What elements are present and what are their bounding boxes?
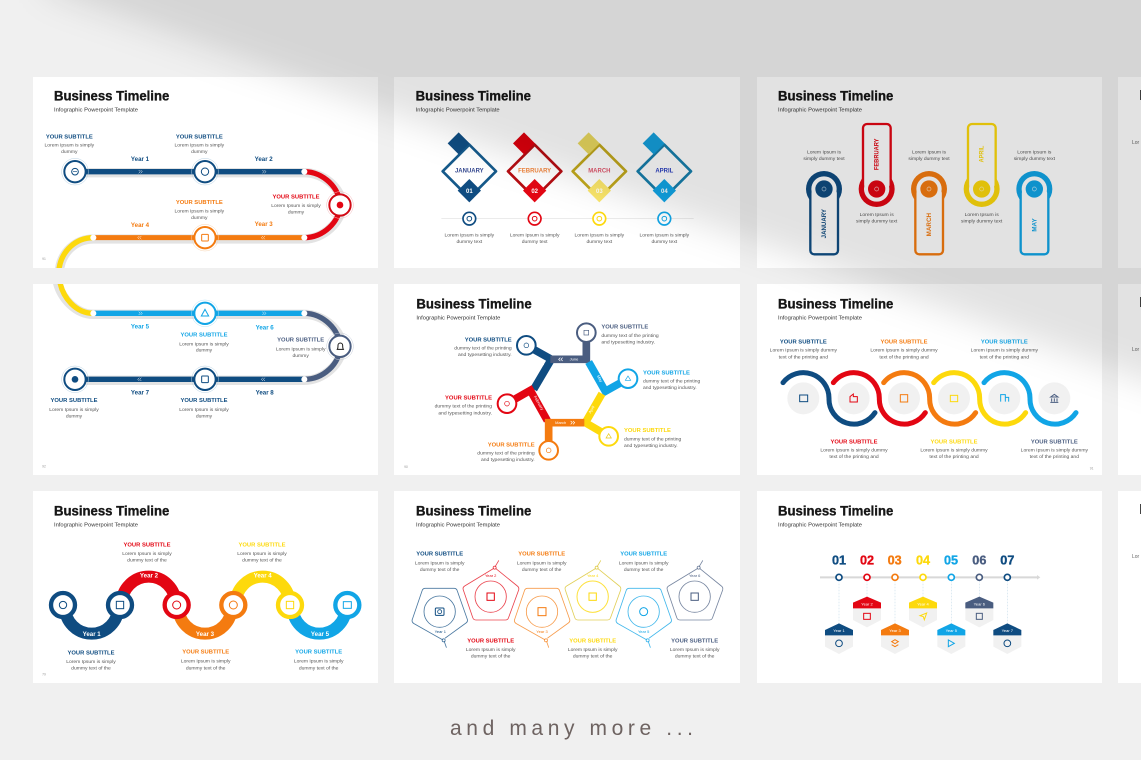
heading subtitle: Infographic Powerpoint Template: [416, 522, 500, 528]
slide panel: ring and arc timeline: [33, 491, 378, 683]
year labels: Year 5: [311, 631, 330, 638]
text block: navy: dummy text of the: [420, 567, 460, 573]
cropped next-column slides: Lor: [1132, 347, 1140, 353]
text block: yellow: [568, 639, 618, 660]
page number: 92: [42, 464, 46, 468]
icon discs: [787, 382, 1070, 414]
text block: yellow: [237, 543, 287, 564]
text block: red: Lorem Ipsum is simply dummy: [820, 448, 888, 454]
captions: simply dummy text: [856, 218, 898, 224]
text block: slate subtitle: YOUR SUBTITLE: [277, 338, 324, 344]
diamond: april: 04: [661, 189, 668, 195]
captions: Lorem Ipsum is simply: [510, 233, 560, 239]
text block: yellow: YOUR SUBTITLE: [569, 639, 616, 645]
text block: yellow: [920, 439, 988, 460]
timeline rule: [441, 218, 694, 220]
text block: navy subtitle left: dummy: [61, 149, 78, 155]
captions: Lorem Ipsum is simply: [640, 233, 690, 239]
hexagon tag year 4: [909, 597, 937, 627]
heading: Business Timeline: [416, 504, 532, 519]
text block: navy: YOUR SUBTITLE: [465, 337, 512, 343]
step numbers: 07: [1000, 554, 1014, 568]
text block: orange: Lorem Ipsum is simply: [181, 659, 231, 665]
text block: red: [466, 639, 516, 660]
text block: navy: [454, 337, 512, 358]
text block: orange: dummy text of the: [186, 665, 226, 671]
year labels: Year 5: [131, 324, 150, 331]
year labels: Year 2: [255, 156, 273, 163]
text block: blue: [619, 552, 669, 573]
text block: navy: and typesetting industry.: [458, 352, 512, 358]
hexagon tag year 5: [937, 623, 965, 654]
axis markers: [836, 574, 1010, 580]
pill: april: [964, 124, 1000, 207]
captions: [445, 233, 690, 245]
text block: yellow: YOUR SUBTITLE: [931, 439, 978, 445]
text block: orange: YOUR SUBTITLE: [182, 650, 229, 656]
pentagon year 4: [565, 561, 621, 620]
icon: blue marker: [658, 212, 671, 225]
text block: navy subtitle center: [175, 134, 225, 155]
text block: red: [820, 439, 888, 460]
captions: [803, 150, 1056, 224]
text block: navy: dummy text of the printing: [454, 346, 512, 352]
text block: blue: YOUR SUBTITLE: [981, 339, 1028, 345]
hexagon tag year 6: Year 6: [974, 601, 986, 606]
captions: dummy text: [651, 239, 678, 245]
captions: Lorem Ipsum is: [1017, 150, 1052, 156]
pentagon year 4: Year 4: [587, 573, 599, 578]
pentagon year 6: Year 6: [689, 573, 701, 578]
diamond: january: JANUARY: [455, 168, 484, 174]
heading: Business Timeline: [778, 296, 894, 311]
step numbers: 05: [944, 554, 958, 568]
text block: blue: Lorem Ipsum is simply: [294, 659, 344, 665]
pentagon year 2: Year 2: [485, 573, 497, 578]
node: whatsapp: [192, 158, 218, 185]
captions: dummy text: [586, 239, 613, 245]
diamond: april: [638, 132, 691, 202]
text block: blue: [294, 650, 344, 671]
text block: navy subtitle left: Lorem Ipsum is simply: [45, 143, 95, 149]
text block: slate: [670, 639, 720, 660]
text block: navy: YOUR SUBTITLE: [780, 339, 827, 345]
text block: navy subtitle left: YOUR SUBTITLE: [51, 398, 98, 404]
diamond: january: 01: [466, 189, 473, 195]
diamond: february: 02: [531, 189, 539, 195]
hexagon tag year 2: Year 2: [861, 601, 873, 606]
text block: orange subtitle: [175, 200, 225, 221]
text block: navy: text of the printing and: [779, 354, 828, 360]
page number: 90: [404, 465, 408, 469]
pill: march: [911, 171, 947, 254]
text block: navy subtitle center: Lorem Ipsum is simply: [179, 407, 229, 413]
heading: Business Timeline: [54, 504, 170, 519]
node: orange: [192, 224, 218, 251]
node: year 1 start: [62, 158, 88, 185]
text block: blue subtitle: dummy: [196, 348, 213, 354]
page number: 91: [1090, 466, 1094, 470]
pill: april: APRIL: [980, 145, 986, 162]
pill: january: [806, 171, 842, 254]
node: slate: [327, 333, 353, 360]
heading: Business Timeline: [54, 89, 170, 104]
heading: Business Timeline: [778, 89, 894, 104]
diamond: january: [443, 132, 496, 202]
year labels: Year 2: [140, 573, 159, 580]
slide panel: hexagon timeline: [394, 284, 740, 475]
text block: orange: [517, 552, 567, 573]
year labels: Year 3: [196, 631, 215, 638]
text block: navy subtitle left: YOUR SUBTITLE: [46, 134, 93, 140]
text block: blue subtitle: [179, 332, 229, 354]
hexagon tag year 1: Year 1: [833, 628, 845, 633]
pentagon year 6: [667, 561, 723, 620]
text block: blue: text of the printing and: [980, 354, 1029, 360]
year labels: [131, 324, 274, 396]
pill: may: MAY: [1032, 218, 1038, 232]
hexagon tag year 6: [965, 597, 993, 627]
text block: red: YOUR SUBTITLE: [445, 395, 492, 401]
text block: blue: [643, 370, 701, 391]
text block: slate: text of the printing and: [1030, 454, 1079, 460]
heading subtitle: Infographic Powerpoint Template: [416, 315, 500, 321]
year labels: Year 1: [83, 631, 101, 638]
text block: orange subtitle: YOUR SUBTITLE: [176, 200, 223, 206]
text block: slate: [601, 325, 659, 345]
pentagon year 2: [463, 561, 519, 620]
text block: red: and typesetting industry.: [438, 410, 492, 416]
text block: orange: YOUR SUBTITLE: [881, 339, 928, 345]
captions: Lorem Ipsum is: [965, 212, 999, 218]
text block: blue: Lorem Ipsum is simply dummy: [971, 348, 1038, 354]
text block: yellow: and typesetting industry.: [624, 443, 678, 449]
year labels: Year 4: [131, 222, 150, 229]
hexagon tag year 4: Year 4: [917, 601, 929, 606]
icon: yellow marker: [593, 212, 606, 225]
hexagon tag year 1: [825, 623, 853, 654]
icon: red marker: [528, 212, 541, 225]
year labels: [83, 573, 330, 638]
cropped next-column slides: [1118, 77, 1141, 683]
pentagon year 5: Year 5: [638, 629, 650, 634]
cropped next-column slides: Lor: [1132, 140, 1140, 146]
arm month labels: June: [570, 357, 579, 362]
text block: navy: YOUR SUBTITLE: [416, 552, 463, 558]
text block: slate: YOUR SUBTITLE: [671, 639, 718, 645]
text block: navy subtitle left: [49, 398, 99, 419]
text block: red: YOUR SUBTITLE: [467, 639, 514, 645]
diagonal window shadow overlay: [45, 0, 1141, 400]
pentagon year 3: [514, 588, 570, 647]
timeline track: [59, 169, 342, 272]
hexagon arm: june: [550, 323, 596, 359]
pentagon year 1: Year 1: [435, 629, 447, 634]
text block: navy subtitle center: Lorem Ipsum is simply: [175, 143, 225, 149]
text block: orange subtitle: Lorem Ipsum is simply: [175, 208, 225, 214]
year labels: Year 3: [255, 221, 273, 228]
heading subtitle: Infographic Powerpoint Template: [778, 522, 862, 528]
text block: navy subtitle left: [45, 134, 95, 155]
hexagon tag year 7: [993, 623, 1021, 654]
diamond: march: 03: [596, 189, 603, 195]
text block: orange subtitle: dummy: [191, 215, 208, 221]
slide panel: winding timeline years 5-8: [33, 279, 378, 475]
text block: navy subtitle center: dummy: [196, 413, 213, 419]
heading: Business Timeline: [416, 89, 531, 104]
slide panel: winding timeline years 1-4: [33, 77, 378, 272]
text block: red subtitle: [271, 195, 321, 216]
arrow axis: [820, 575, 1040, 580]
text block: slate: and typesetting industry.: [601, 339, 655, 345]
text block: navy: Lorem Ipsum is simply: [415, 560, 465, 566]
text block: slate subtitle: [276, 338, 326, 359]
text block: slate: Lorem Ipsum is simply dummy: [1021, 448, 1088, 454]
hexagon tag year 5: Year 5: [946, 628, 958, 633]
text block: red: dummy text of the: [471, 654, 511, 660]
step numbers: 02: [860, 554, 874, 568]
captions: simply dummy text: [961, 218, 1003, 224]
text block: navy subtitle left: dummy: [66, 413, 83, 419]
pentagon year 1: [412, 588, 467, 647]
disc icons: [800, 394, 1058, 402]
heading: Business Timeline: [778, 504, 894, 519]
text block: yellow: text of the printing and: [929, 454, 979, 460]
text block: yellow: dummy text of the printing: [624, 437, 682, 443]
text block: slate: dummy text of the: [675, 654, 715, 660]
text block: orange: and typesetting industry.: [481, 457, 535, 463]
text block: navy subtitle left: Lorem Ipsum is simply: [49, 407, 99, 413]
pentagon year 5: [616, 588, 671, 647]
text block: slate: Lorem Ipsum is simply: [670, 647, 720, 653]
dashed connectors: [839, 581, 1007, 623]
hexagon tag year 3: [881, 623, 909, 654]
pill: may: [1016, 171, 1052, 254]
captions: Lorem Ipsum is simply: [575, 233, 625, 239]
year labels: [131, 156, 273, 229]
year labels: Year 4: [254, 573, 272, 580]
year labels: Year 1: [131, 156, 150, 163]
text block: orange: dummy text of the printing: [477, 451, 535, 457]
text block: slate: dummy text of the printing: [601, 333, 659, 339]
hexagon arm: march: [539, 423, 584, 460]
pill: january: JANUARY: [822, 209, 828, 238]
text block: blue: Lorem Ipsum is simply: [619, 560, 669, 566]
captions: dummy text: [522, 239, 548, 245]
text block: orange: YOUR SUBTITLE: [488, 442, 535, 448]
text block: yellow: dummy text of the: [242, 558, 282, 564]
text block: blue: and typesetting industry.: [643, 385, 697, 391]
text block: blue: YOUR SUBTITLE: [643, 370, 690, 376]
node: blue: [192, 300, 218, 327]
text block: navy: Lorem Ipsum is simply dummy: [770, 348, 837, 354]
text block: navy: [415, 552, 465, 573]
text block: orange: Lorem Ipsum is simply dummy: [870, 348, 938, 354]
hexagon tag year 3: Year 3: [889, 628, 901, 633]
cropped next-column slides: Lor: [1132, 554, 1140, 560]
captions: Lorem Ipsum is: [912, 150, 947, 156]
heading subtitle: Infographic Powerpoint Template: [778, 315, 862, 321]
step numbers: 04: [916, 554, 930, 568]
slide panel: diamonds by month: [394, 77, 740, 268]
captions: simply dummy text: [908, 156, 950, 162]
year labels: Year 8: [256, 389, 274, 396]
caption: and many more: and many more ...: [450, 717, 693, 740]
hexagon tag year 7: Year 7: [1002, 628, 1014, 633]
text block: orange: text of the printing and: [879, 354, 929, 360]
text block: yellow: YOUR SUBTITLE: [239, 543, 286, 549]
slide panel: wave ribbon timeline: [757, 284, 1102, 475]
text block: navy subtitle center: [179, 398, 229, 419]
text block: yellow: YOUR SUBTITLE: [624, 428, 671, 434]
heading subtitle: Infographic Powerpoint Template: [778, 107, 862, 113]
text block: red: dummy text of the: [127, 558, 167, 564]
arc segments: [65, 577, 346, 634]
hexagon arm: may: [589, 362, 637, 391]
text block: red: Lorem Ipsum is simply: [122, 551, 172, 557]
captions: Lorem Ipsum is simply: [445, 233, 495, 239]
arm month labels: April: [587, 405, 596, 414]
text block: yellow: [624, 428, 682, 449]
text block: navy: [770, 339, 837, 360]
text block: yellow: Lorem Ipsum is simply: [568, 647, 618, 653]
hexagon arm: january: [517, 336, 551, 389]
step numbers: 06: [972, 554, 986, 568]
text block: red: [435, 395, 492, 416]
step numbers: 03: [888, 554, 902, 568]
captions: simply dummy text: [1014, 156, 1056, 162]
text block: red: YOUR SUBTITLE: [124, 543, 171, 549]
pentagon year 3: Year 3: [536, 629, 548, 634]
text block: slate: YOUR SUBTITLE: [1031, 439, 1078, 445]
page number: 79: [42, 672, 46, 676]
page number: 91: [42, 257, 46, 261]
diamond: february: [508, 132, 561, 202]
text block: navy subtitle center: dummy: [191, 149, 208, 155]
text block: blue: dummy text of the: [624, 567, 664, 573]
arm month labels: May: [596, 374, 604, 383]
node: red: [327, 192, 353, 218]
timeline track: [57, 279, 342, 382]
text block: orange: dummy text of the: [522, 567, 562, 573]
step numbers: [832, 554, 1014, 568]
text block: slate: YOUR SUBTITLE: [601, 325, 648, 331]
arm month labels: February: [533, 395, 545, 411]
year labels: Year 7: [131, 389, 150, 396]
text block: red: text of the printing and: [829, 454, 879, 460]
icon: navy marker: [463, 212, 476, 225]
text block: orange: Lorem Ipsum is simply: [517, 560, 567, 566]
text block: navy subtitle center: YOUR SUBTITLE: [181, 398, 228, 404]
text block: blue: YOUR SUBTITLE: [295, 650, 342, 656]
text block: orange: [477, 442, 535, 463]
pill: february: FEBRUARY: [875, 138, 881, 170]
text block: navy: dummy text of the: [71, 666, 111, 672]
captions: Lorem Ipsum is: [860, 212, 894, 218]
diamond: april: APRIL: [655, 168, 674, 174]
text block: navy subtitle center: YOUR SUBTITLE: [176, 134, 223, 140]
text block: blue: dummy text of the printing: [643, 379, 701, 385]
slide panel: numbered axis with hexagons: [757, 491, 1102, 683]
node: navy left: [62, 366, 88, 393]
text block: red: [122, 543, 172, 564]
captions: dummy text: [456, 239, 483, 245]
node: navy center: [192, 366, 218, 393]
hexagon tag year 2: [853, 597, 881, 627]
text block: blue: YOUR SUBTITLE: [620, 552, 667, 558]
text block: yellow: Lorem Ipsum is simply: [237, 551, 287, 557]
text block: orange: YOUR SUBTITLE: [518, 552, 565, 558]
pill: march: MARCH: [927, 213, 933, 236]
diamond: march: [573, 132, 626, 202]
text block: blue: [971, 339, 1038, 360]
text block: red subtitle: YOUR SUBTITLE: [273, 195, 320, 201]
step numbers: 01: [832, 554, 846, 568]
slide panel: pill timeline by month: [757, 77, 1102, 268]
wave segments: [783, 373, 1076, 424]
text block: yellow: dummy text of the: [573, 654, 613, 660]
text block: red subtitle: dummy: [288, 210, 305, 216]
text block: red subtitle: Lorem Ipsum is simply: [271, 203, 321, 209]
text block: navy: YOUR SUBTITLE: [68, 650, 115, 656]
text block: blue subtitle: Lorem Ipsum is simply: [179, 341, 229, 347]
text block: navy: Lorem Ipsum is simply: [66, 659, 116, 665]
year labels: Year 6: [256, 324, 274, 331]
diamond: february: FEBRUARY: [518, 168, 551, 174]
text block: blue: dummy text of the: [299, 665, 339, 671]
text block: red: dummy text of the printing: [435, 404, 492, 410]
arm month labels: March: [555, 420, 566, 425]
ring nodes with icons: [51, 593, 359, 617]
hexagon arm: february: [498, 390, 547, 421]
text block: slate subtitle: Lorem Ipsum is simply: [276, 347, 326, 353]
pill: february: [859, 124, 895, 207]
captions: simply dummy text: [803, 156, 845, 162]
heading subtitle: Infographic Powerpoint Template: [416, 107, 500, 113]
text block: navy: [66, 650, 116, 672]
captions: Lorem Ipsum is: [807, 150, 842, 156]
text block: orange: [181, 650, 231, 671]
text block: blue subtitle: YOUR SUBTITLE: [181, 332, 228, 338]
text block: slate subtitle: dummy: [292, 353, 309, 359]
heading subtitle: Infographic Powerpoint Template: [54, 522, 138, 528]
arm month labels: [533, 357, 604, 425]
text block: red: YOUR SUBTITLE: [831, 439, 878, 445]
slide panel: pentagon timeline: [394, 491, 740, 683]
text block: yellow: Lorem Ipsum is simply dummy: [920, 448, 988, 454]
heading subtitle: Infographic Powerpoint Template: [54, 107, 138, 113]
heading: Business Timeline: [416, 296, 532, 311]
text block: orange: [870, 339, 938, 360]
arm month labels: January: [533, 361, 545, 376]
hexagon arm: april: [585, 394, 618, 446]
text block: slate: [1021, 439, 1088, 460]
diamond: march: MARCH: [588, 168, 610, 174]
text block: red: Lorem Ipsum is simply: [466, 647, 516, 653]
